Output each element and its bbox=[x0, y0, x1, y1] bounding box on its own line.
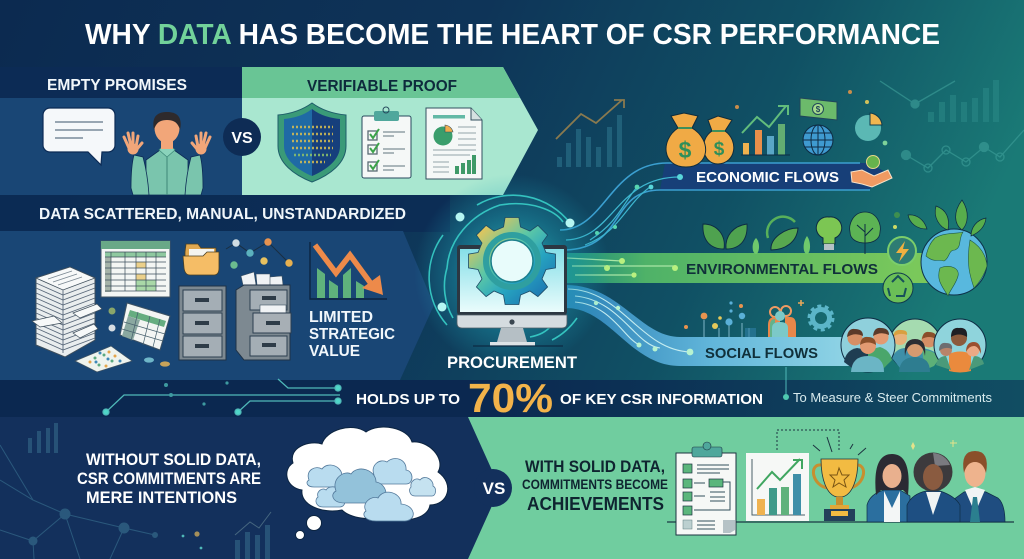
icon: money bags: $ bbox=[714, 139, 725, 160]
label: social flows: SOCIAL FLOWS bbox=[705, 345, 818, 362]
icon: hand with coin bbox=[851, 156, 892, 187]
icon: people circle 1 bbox=[841, 318, 895, 372]
faint network: top right bbox=[880, 81, 1024, 172]
heading: data scattered: DATA SCATTERED, MANUAL, UNSTANDARDIZED bbox=[39, 206, 406, 223]
text: to measure and steer: To Measure & Steer Commitments bbox=[793, 391, 992, 405]
panel: with solid data bbox=[468, 417, 1024, 559]
icon: speech bubble bbox=[43, 108, 115, 165]
title: WHY DATA HAS BECOME THE HEART OF CSR PERFORMANCE bbox=[85, 19, 940, 51]
icon: data sticks bbox=[704, 320, 749, 337]
text: without solid data bbox=[77, 450, 261, 507]
circuit lines bbox=[103, 379, 341, 415]
label: economic flows: ECONOMIC FLOWS bbox=[696, 169, 839, 186]
icon: banknote: $ bbox=[816, 105, 821, 114]
icon: checklist clipboard bbox=[362, 107, 411, 178]
strip: 70 percent banner bbox=[0, 367, 1024, 421]
text: without solid data: CSR COMMITMENTS ARE bbox=[77, 469, 261, 488]
text: without solid data: WITHOUT SOLID DATA, bbox=[86, 450, 261, 469]
text: limited strategic value bbox=[309, 309, 395, 360]
icon: light bulb bbox=[816, 217, 842, 250]
text: limited strategic value: LIMITED bbox=[309, 309, 373, 326]
icon: three business people bbox=[867, 451, 1005, 522]
ribbon: social flows bbox=[566, 285, 860, 366]
icon: filing cabinet open bbox=[236, 272, 291, 360]
faint chart: top right bbox=[928, 80, 999, 122]
icon: shrugging person bbox=[124, 112, 210, 195]
panel: verifiable proof bbox=[242, 67, 538, 195]
connector: measure bbox=[783, 367, 789, 400]
text: of key csr information: OF KEY CSR INFORMATION bbox=[560, 391, 763, 408]
heading: verifiable proof: VERIFIABLE PROOF bbox=[307, 78, 457, 95]
stat: 70 percent: 70% bbox=[468, 375, 553, 421]
text: with solid data: COMMITMENTS BECOME bbox=[522, 476, 668, 492]
panel: data scattered bbox=[0, 195, 450, 380]
icon: filing cabinet closed bbox=[179, 286, 226, 360]
icon: people circle 3 bbox=[934, 319, 986, 372]
icon: tree bbox=[850, 212, 880, 254]
icons: environmental flows bbox=[703, 200, 987, 303]
faint network and bars bbox=[0, 445, 158, 559]
ribbon: environmental flows bbox=[566, 253, 930, 283]
VS badge: bottom bbox=[474, 469, 512, 507]
icon: twin leaves bbox=[703, 224, 747, 249]
VS badge: bottom: VS bbox=[483, 479, 505, 498]
text: with solid data: WITH SOLID DATA, bbox=[525, 457, 665, 476]
icon: growth chart board bbox=[746, 453, 809, 521]
icon: thought cloud bbox=[287, 427, 448, 540]
icon: money bags bbox=[666, 113, 734, 167]
icon: trophy bbox=[813, 437, 866, 521]
icon: spreadsheet window bbox=[101, 241, 170, 297]
icon: pie bbox=[855, 113, 882, 141]
ribbon: economic flows bbox=[660, 163, 892, 190]
icon: banknote bbox=[800, 98, 837, 120]
icon: scattered network bbox=[226, 238, 293, 269]
icon: recycle badge bbox=[883, 273, 913, 303]
text: with solid data: ACHIEVEMENTS bbox=[527, 494, 664, 514]
label: environmental flows: ENVIRONMENTAL FLOWS bbox=[686, 261, 878, 278]
icon: energy badge bbox=[888, 237, 916, 265]
text: without solid data: MERE INTENTIONS bbox=[86, 488, 237, 507]
icon: process clipboard bbox=[676, 442, 736, 535]
text: limited strategic value: VALUE bbox=[309, 343, 360, 360]
panel: empty promises bbox=[0, 67, 242, 195]
icon: paper stack bbox=[32, 267, 102, 357]
panel: without solid data bbox=[0, 417, 510, 559]
icon: gear bbox=[809, 306, 833, 330]
faint trend chart: middle bbox=[556, 100, 624, 167]
icon: plus spark bbox=[798, 300, 804, 306]
icon: growth chart bbox=[741, 106, 790, 155]
heading: empty promises: EMPTY PROMISES bbox=[47, 77, 187, 94]
icon: folder bbox=[183, 244, 219, 275]
VS badge: top bbox=[223, 118, 261, 156]
icon: recycled leaf bbox=[753, 217, 810, 254]
icon: data shield bbox=[278, 103, 346, 182]
icon: earth with sprouting leaves bbox=[893, 200, 987, 296]
icon: money bags: $ bbox=[679, 137, 692, 163]
icon: group of three bbox=[768, 306, 796, 337]
flow ribbons bbox=[560, 163, 930, 366]
label: procurement: PROCUREMENT bbox=[447, 353, 578, 372]
icon: declining chart bbox=[310, 242, 387, 299]
icon: procurement computer with gear bbox=[414, 174, 610, 370]
icon: people circle 2 bbox=[889, 319, 941, 372]
icon: report document bbox=[426, 108, 482, 179]
icons: social flows bbox=[684, 300, 986, 372]
ground line bbox=[667, 521, 1014, 523]
text: with solid data bbox=[522, 457, 668, 514]
dotted connector bbox=[777, 430, 839, 450]
icons: economic flows bbox=[666, 90, 892, 187]
text: holds up to: HOLDS UP TO bbox=[356, 391, 460, 408]
VS badge: top: VS bbox=[231, 130, 253, 147]
text: limited strategic value: STRATEGIC bbox=[309, 326, 395, 343]
icon: small sheet bbox=[108, 303, 170, 350]
icon: globe bbox=[803, 125, 833, 155]
icon: dotted sheet bbox=[75, 346, 170, 372]
